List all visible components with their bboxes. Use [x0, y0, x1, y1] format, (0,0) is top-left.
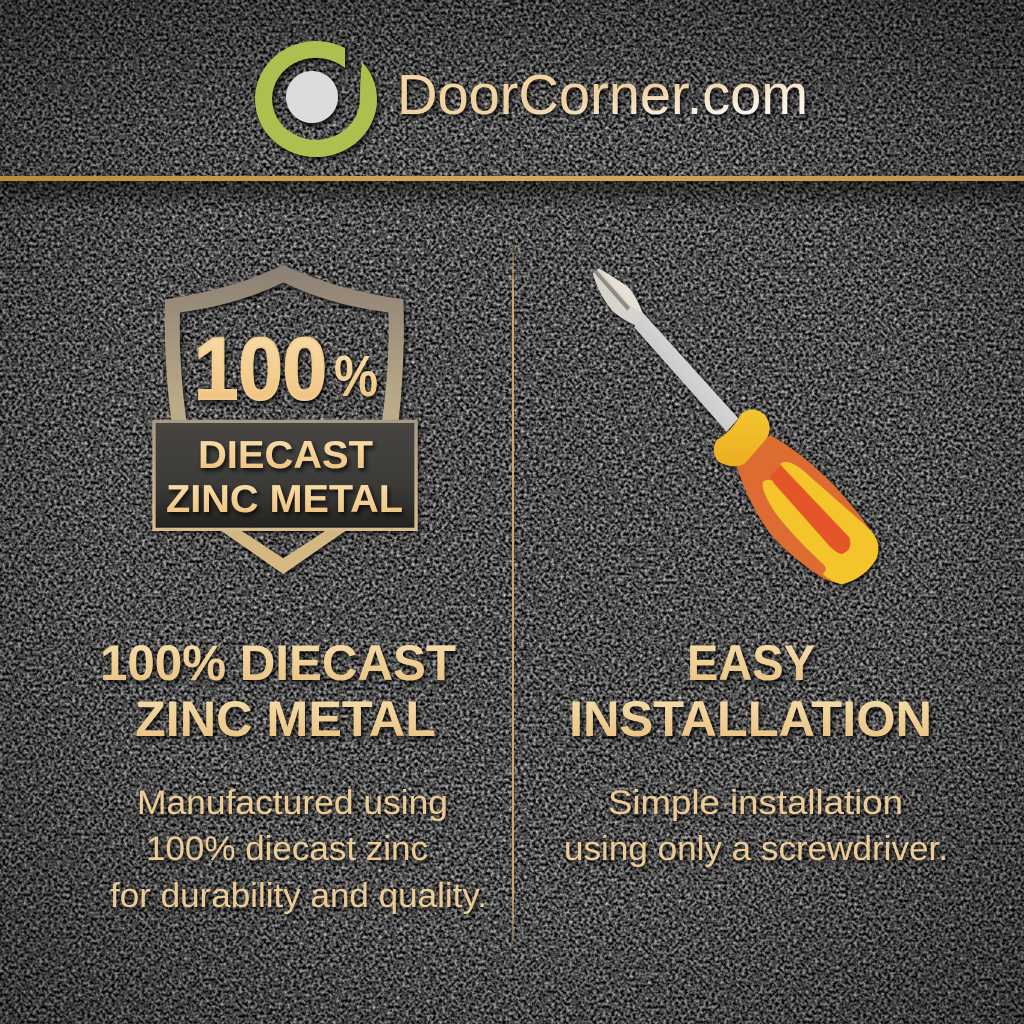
- handle red centre stripe: [770, 465, 850, 554]
- heading: easy installation: EASY: [687, 635, 815, 691]
- gold horizontal divider: [0, 176, 1024, 181]
- gold vertical divider: [512, 235, 514, 951]
- banner plate: [154, 421, 416, 529]
- shield frame: [165, 265, 404, 574]
- logo wordmark: DoorCorner.com: [397, 63, 808, 127]
- icon: screwdriver: [593, 268, 878, 584]
- icon: shield badge: %: [334, 344, 378, 409]
- body text: zinc description: [110, 784, 487, 915]
- heading: easy installation: INSTALLATION: [569, 691, 932, 747]
- screwdriver shaft: [634, 313, 738, 432]
- panel: easy installation: [564, 268, 948, 868]
- logo icon: green ring with white disc: [255, 41, 377, 157]
- body text: zinc description: 100% diecast zinc: [146, 830, 428, 868]
- screwdriver handle body: [737, 435, 878, 584]
- icon: shield badge: [154, 265, 416, 574]
- handle yellow grips: [763, 462, 878, 584]
- heading: 100% diecast zinc metal: ZINC METAL: [135, 691, 436, 747]
- body text: installation description: using only a screwdriver.: [564, 830, 948, 868]
- heading: easy installation: [569, 635, 932, 747]
- body text: installation description: Simple installation: [608, 784, 903, 822]
- heading: 100% diecast zinc metal: 100% DIECAST: [100, 635, 456, 691]
- logo: DoorCorner.com: [255, 41, 808, 157]
- badge text: zinc metal: ZINC METAL: [166, 478, 403, 521]
- heading: 100% diecast zinc metal: [100, 635, 456, 747]
- badge text: diecast: DIECAST: [198, 434, 373, 477]
- badge text: 100%: 100: [194, 319, 327, 418]
- body text: installation description: [564, 784, 948, 868]
- screwdriver blade: [593, 268, 643, 326]
- body text: zinc description: Manufactured using: [137, 784, 448, 822]
- body text: zinc description: for durability and quality.: [110, 877, 487, 915]
- panel: diecast zinc metal: [100, 265, 487, 915]
- handle yellow collar: [714, 410, 770, 466]
